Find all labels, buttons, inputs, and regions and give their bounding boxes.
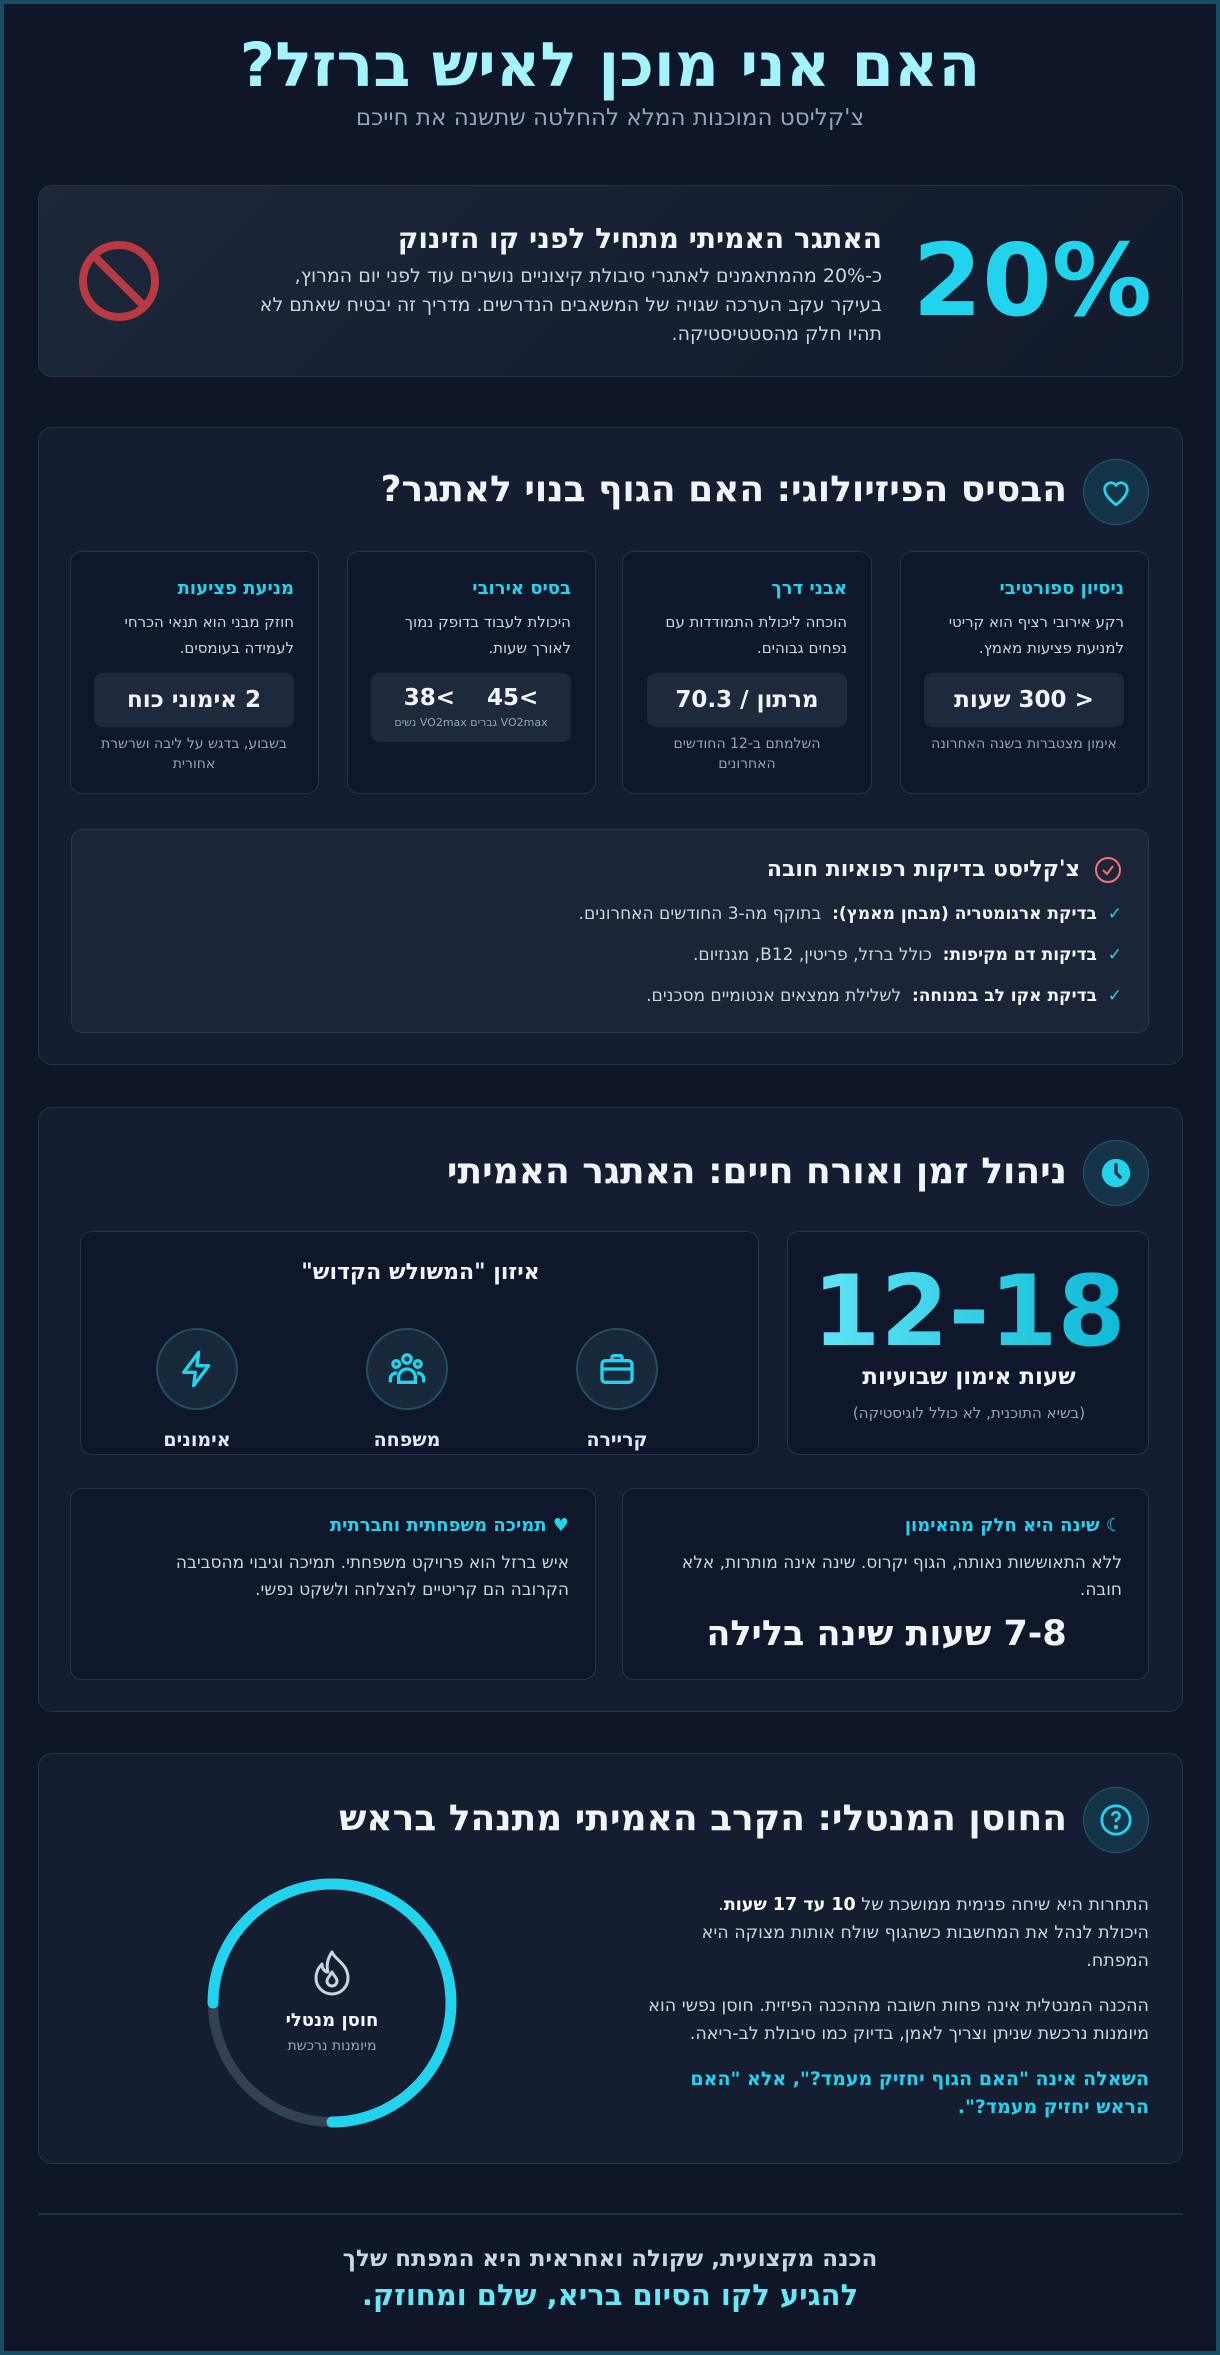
icon: training: אימונים [163,1429,231,1451]
heading: הבסיס הפיזיולוגי: האם הגוף בנוי לאתגר? [381,469,1067,510]
panel: 20% intro [38,185,1183,377]
body text [260,265,882,345]
chart: ring: חוסן מנטלי [286,2010,378,2031]
text block [648,1895,1149,2118]
card: aerobic base: VO2max גברים VO2max נשים [394,716,548,729]
card: weekly hours [787,1231,1149,1455]
chart: ring [208,1878,456,2128]
card: weekly hours: 12-18 [812,1255,1126,1369]
card: sport experience: ניסיון ספורטיבי [999,578,1124,599]
card: milestones: אבני דרך [771,578,847,599]
card: sport experience: < 300 שעות [954,687,1094,713]
card: aerobic base: היכולת לעבוד בדופק נמוך לאורך שעות. [405,613,571,657]
card: injury prevention: מניעת פציעות [178,578,294,599]
card: sleep [622,1488,1149,1680]
card: weekly hours: (בשיא התוכנית, לא כולל לוגיסטיקה) [853,1404,1085,1422]
card: injury prevention [70,551,319,794]
text block: התחרות היא שיחה פנימית ממושכת של 10 עד 17 שעות. [718,1895,1149,1915]
checklist: medical tests: ✓ בדיקת ארגומטריה (מבחן מאמץ): בתוקף מה-3 החודשים האחרונים. [579,904,1122,924]
body text: בעיקר עקב הערכה שגויה של המשאבים הנדרשים. מדריך זה יבטיח שאתם לא תהיו חלק מהסטטיסטיקה. [260,294,882,345]
card: milestones [622,551,872,794]
card: holy triangle: איזון "המשולש הקדוש" [301,1260,540,1285]
checklist: medical tests: ✓ בדיקות דם מקיפות: כולל ברזל, פריטין, B12, מגנזיום. [693,945,1122,965]
panel: physiological base [38,427,1183,1065]
card: injury prevention: בשבוע, בדגש על ליבה ושרשרת אחורית [101,736,287,772]
card: milestones: הוכחה ליכולת התמודדות עם נפחים גבוהים. [665,613,847,657]
card: aerobic base [347,551,596,794]
footer text: הכנה מקצועית, שקולה ואחראית היא המפתח שלך [343,2246,877,2272]
chart: ring: מיומנות נרכשת [287,2038,377,2054]
icon: family: משפחה [374,1429,440,1451]
card: aerobic base: בסיס אירובי [472,578,571,599]
icon: prohibited [79,241,159,321]
panel: time management [38,1107,1183,1712]
card: sport experience: רקע אירובי רציף הוא קריטי למניעת פציעות מאמץ. [949,613,1124,657]
stat: 20%: 20% [913,222,1152,339]
icon: training [156,1328,238,1451]
card: family support: איש ברזל הוא פרויקט משפחתי. תמיכה וגיבוי מהסביבה הקרובה הם קריטיים להצלחה ולשקט נפשי. [176,1553,569,1600]
footer text [343,2246,877,2312]
card: sport experience: אימון מצטברות בשנה האחרונה [931,736,1117,752]
icon: check circle [1095,857,1121,883]
checklist: medical tests [71,829,1149,1033]
text block: היכולת לנהל את המחשבות כשהגוף שולח אותות מצוקה היא המפתח. [702,1923,1149,1971]
card: injury prevention: חוזק מבני הוא תנאי הכרחי לעמידה בעומסים. [124,613,294,657]
card: aerobic base: 38< 45< [404,685,538,711]
footer text: להגיע לקו הסיום בריא, שלם ומחוזק. [362,2278,858,2312]
divider [38,2213,1183,2215]
heading: האתגר האמיתי מתחיל לפני קו הזינוק [398,222,882,255]
card: family support [70,1488,596,1680]
icon: family [366,1328,448,1451]
card: sleep: 7-8 שעות שינה בלילה [706,1614,1067,1654]
subtitle: צ'קליסט המוכנות המלא להחלטה שתשנה את חייכם [356,105,864,131]
icon: heart [1083,459,1149,525]
card: sport experience [900,551,1149,794]
icon: career: קריירה [586,1429,648,1451]
body text: כ-20% מהמתאמנים לאתגרי סיבולת קיצוניים נושרים עוד לפני יום המרוץ, [295,265,882,287]
card: weekly hours: שעות אימון שבועיות [862,1364,1076,1390]
card: family support: ♥ תמיכה משפחתית וחברתית [330,1515,569,1536]
card: sleep: ☾ שינה היא חלק מהאימון [905,1515,1122,1536]
icon: clock [1083,1140,1149,1206]
card: holy triangle [80,1231,759,1455]
icon: question [1083,1787,1149,1853]
heading: ניהול זמן ואורח חיים: האתגר האמיתי [447,1151,1067,1192]
card: milestones: השלמתם ב-12 החודשים האחרונים [674,736,820,772]
checklist: medical tests: ✓ בדיקת אקו לב במנוחה: לשלילת ממצאים אנטומיים מסכנים. [646,986,1122,1006]
icon: flame [316,1952,348,1994]
panel: mental resilience [38,1753,1183,2164]
title: האם אני מוכן לאיש ברזל? [240,30,980,101]
text block: השאלה אינה "האם הגוף יחזיק מעמד?", אלא "האם הראש יחזיק מעמד?". [690,2068,1149,2118]
icon: career [576,1328,658,1451]
heading: החוסן המנטלי: הקרב האמיתי מתנהל בראש [339,1798,1067,1839]
card: sleep: ללא התאוששות נאותה, הגוף יקרוס. שינה אינה מותרות, אלא חובה. [682,1553,1122,1600]
card: injury prevention: 2 אימוני כוח [127,687,261,713]
checklist: medical tests: צ'קליסט בדיקות רפואיות חובה [767,857,1080,882]
card: milestones: מרתון / 70.3 [675,687,819,713]
text block: ההכנה המנטלית אינה פחות חשובה מההכנה הפיזית. חוסן נפשי הוא מיומנות נרכשת שניתן וצריך לאמן, בדיוק כמו סיבולת לב-ריאה. [648,1996,1149,2044]
